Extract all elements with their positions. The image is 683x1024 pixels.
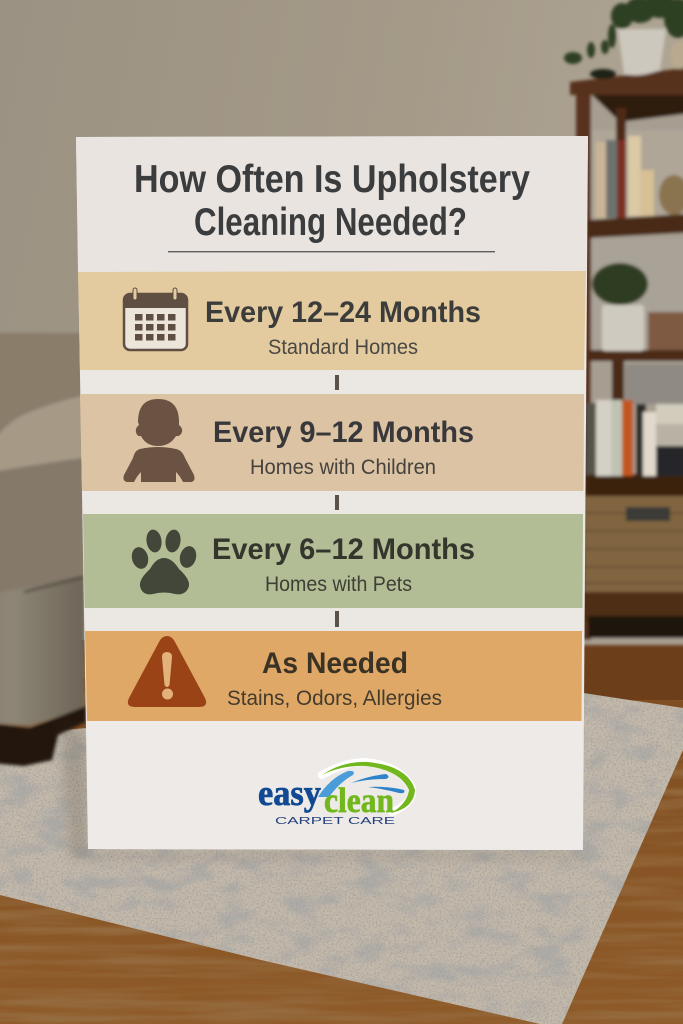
wood floor xyxy=(0,640,683,1024)
green swoosh xyxy=(322,762,415,813)
panel: as needed xyxy=(85,631,582,721)
books lower shelf xyxy=(586,400,683,476)
text: standard homes: Standard Homes xyxy=(268,336,418,359)
title: How Often Is Upholstery xyxy=(134,158,530,201)
plant and pot on top shelf xyxy=(564,0,683,79)
panel: footer xyxy=(87,721,583,850)
panel: homes with children xyxy=(80,394,584,491)
books upper shelf xyxy=(596,136,683,218)
plant on mid shelf xyxy=(592,263,683,351)
panel: standard homes xyxy=(78,271,586,370)
panel: homes with pets xyxy=(83,514,583,608)
title xyxy=(134,158,530,244)
wall xyxy=(0,0,683,700)
title: Cleaning Needed? xyxy=(194,201,467,244)
icon: paw print xyxy=(129,529,199,594)
logo: easy clean carpet care xyxy=(258,762,415,827)
wordmark carpet care: CARPET CARE xyxy=(275,816,396,827)
text: every 9-12 months: Every 9–12 Months xyxy=(213,416,474,449)
icon: calendar xyxy=(124,288,187,350)
connector 1 xyxy=(335,375,339,390)
shadow under the board xyxy=(60,720,585,858)
bookshelf xyxy=(564,0,683,645)
text: as needed: As Needed xyxy=(262,647,408,680)
text: every 6-12 months: Every 6–12 Months xyxy=(212,533,475,566)
text: homes with pets: Homes with Pets xyxy=(265,573,412,596)
wordmark clean: clean xyxy=(324,781,394,820)
top panel tint xyxy=(76,136,588,272)
text: stains, odors, allergies: Stains, Odors, Allergies xyxy=(227,687,442,710)
blue water streaks xyxy=(318,771,404,797)
sofa xyxy=(0,333,86,766)
connector 2 xyxy=(335,495,339,510)
poster board xyxy=(76,136,588,850)
rug xyxy=(0,690,683,1024)
icon: child silhouette xyxy=(123,399,194,482)
white halo xyxy=(322,762,412,812)
icon: warning triangle xyxy=(128,636,206,707)
text: homes with children: Homes with Children xyxy=(250,456,436,479)
connector 3 xyxy=(335,611,339,627)
text: every 12-24 months: Every 12–24 Months xyxy=(205,296,481,329)
wordmark easy: easy xyxy=(258,773,321,813)
board sheet xyxy=(76,136,588,850)
title rule xyxy=(168,251,495,252)
